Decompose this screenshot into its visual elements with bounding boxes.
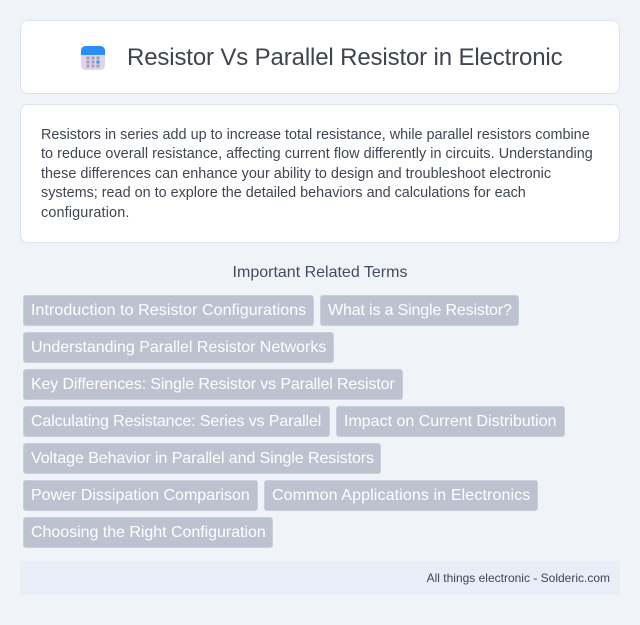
tag xyxy=(23,480,258,511)
tag: Impact on Current Distribution xyxy=(344,413,557,430)
intro paragraph: configuration. xyxy=(41,204,130,220)
icon: calendar xyxy=(81,46,105,70)
tag: Common Applications in Electronics xyxy=(272,487,530,504)
tag: Power Dissipation Comparison xyxy=(31,487,250,504)
panel: title card xyxy=(20,20,620,94)
tag xyxy=(23,295,314,326)
tag xyxy=(320,295,519,326)
intro paragraph: these differences can enhance your ability to design and troubleshoot electronic xyxy=(41,166,551,182)
panel: intro text card xyxy=(20,104,620,243)
tag: Introduction to Resistor Configurations xyxy=(31,302,306,319)
title: Resistor Vs Parallel Resistor in Electronic xyxy=(127,44,562,71)
tag xyxy=(264,480,538,511)
footer: All things electronic - Solderic.com xyxy=(427,571,610,585)
tag xyxy=(23,517,273,548)
intro paragraph: to reduce overall resistance, affecting current flow differently in circuits. Understanding xyxy=(41,146,593,162)
tag xyxy=(336,406,565,437)
heading: related terms: Important Related Terms xyxy=(233,264,407,281)
tag: Voltage Behavior in Parallel and Single Resistors xyxy=(31,450,374,467)
intro paragraph: Resistors in series add up to increase total resistance, while parallel resistors combine xyxy=(41,126,590,142)
intro paragraph xyxy=(41,126,593,220)
tag xyxy=(23,369,403,400)
tag: Calculating Resistance: Series vs Parallel xyxy=(31,413,321,430)
footer xyxy=(20,561,620,595)
tag xyxy=(23,443,381,474)
tag: Key Differences: Single Resistor vs Parallel Resistor xyxy=(31,376,395,393)
tag: Understanding Parallel Resistor Networks xyxy=(31,339,326,356)
tag xyxy=(23,406,330,437)
intro paragraph: systems; read on to explore the detailed behaviors and calculations for each xyxy=(41,185,526,201)
tag xyxy=(23,332,334,363)
tag: Choosing the Right Configuration xyxy=(31,524,266,541)
tag: What is a Single Resistor? xyxy=(328,302,512,319)
tags list xyxy=(23,295,565,548)
